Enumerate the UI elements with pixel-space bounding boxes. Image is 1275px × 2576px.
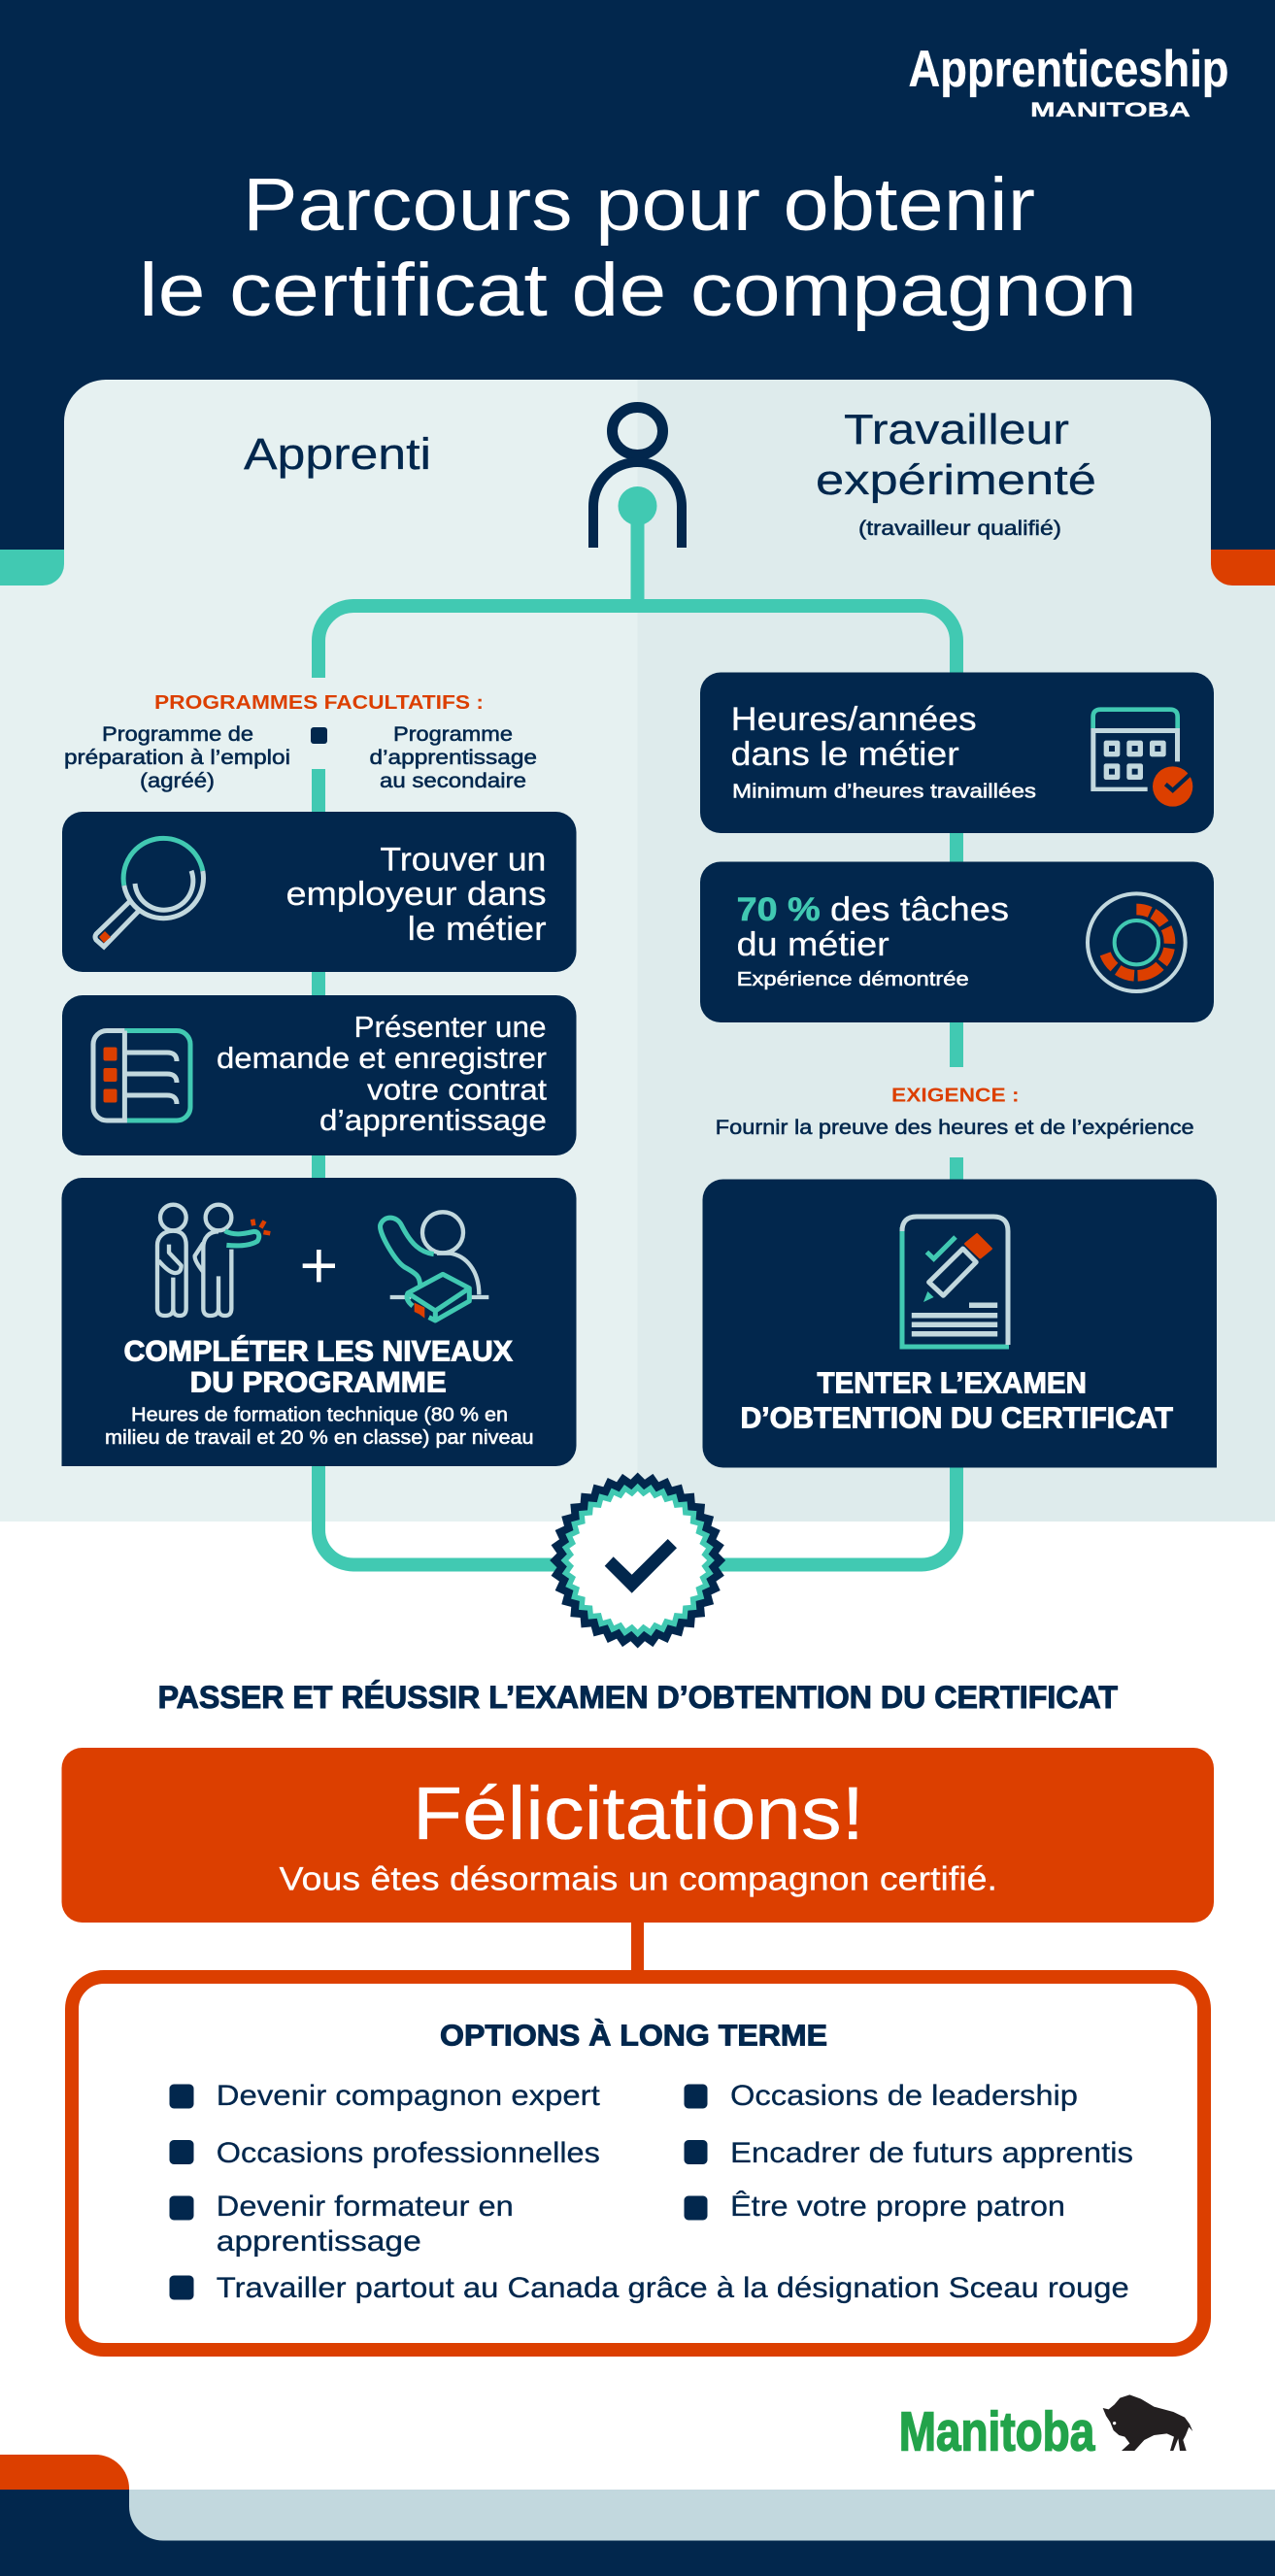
card: find an employer: Trouver un [380,841,546,878]
list: options: apprentissage [217,2225,421,2258]
logo: Apprenticeship Manitoba: Apprenticeship [909,41,1229,98]
text: requirement: Fournir la preuve des heures et de l’expérience [716,1116,1194,1139]
card: complete program levels: DU PROGRAMME [190,1367,447,1398]
heading: Travailleur expérimenté: (travailleur qualifié) [858,518,1061,540]
heading: long-term options: OPTIONS À LONG TERME [440,2019,827,2053]
card: 70% of trade tasks: Expérience démontrée [737,968,969,990]
connector lines: teal pathway [319,506,956,1565]
icon: person [593,408,682,548]
card: complete program levels: Heures de formation technique (80 % en [131,1404,508,1425]
card: hours and years in the trade: Heures/années [731,701,977,738]
text: optional programmes: Programme [393,722,513,746]
panel: pathway background [0,380,1275,1522]
list: options [170,2080,1133,2304]
list: options: Devenir formateur en [217,2191,514,2223]
card: find an employer [62,812,577,972]
card: 70% of trade tasks: 70 % [737,891,821,928]
text: optional programmes: préparation à l’emploi [64,746,290,769]
text: optional programmes: PROGRAMMES FACULTATIFS : [154,691,484,714]
teal corner tab [0,550,64,585]
list: options: Encadrer de futurs apprentis [730,2137,1133,2169]
text: requirement [716,1085,1194,1139]
list: options: Devenir compagnon expert [217,2080,601,2112]
card: find an employer: le métier [408,911,547,948]
logo: Manitoba wordmark and bison: Manitoba [899,2400,1095,2462]
text: optional programmes: Programme de [102,722,253,746]
card: complete program levels: milieu de travail et 20 % en classe) par niveau [105,1427,534,1449]
heading: Travailleur expérimenté [816,406,1096,540]
card: attempt certification exam [703,1179,1217,1468]
logo: Apprenticeship Manitoba: MANITOBA [1030,99,1191,121]
card: hours and years in the trade: dans le métier [731,736,959,773]
card: submit application: demande et enregistrer [217,1041,547,1075]
title: le certificat de compagnon [139,249,1137,332]
card: complete program levels [62,1178,577,1466]
card: complete program levels: COMPLÉTER LES NIVEAUX [124,1334,513,1367]
text: optional programmes: d’apprentissage [369,746,537,769]
list: options: Travailler partout au Canada grâce à la désignation Sceau rouge [217,2272,1129,2304]
card: hours and years in the trade [700,672,1214,833]
heading: Travailleur expérimenté: expérimenté [816,456,1096,504]
icon: calendar with check [1090,710,1192,807]
panel: congratulations [62,1748,1214,1923]
card: attempt certification exam: D’OBTENTION DU CERTIFICAT [740,1401,1173,1435]
orange corner tab [1211,550,1275,585]
footer band [0,2455,1275,2576]
text: optional programmes: au secondaire [380,769,526,792]
card: find an employer: employeur dans [286,876,547,913]
connector: orange [631,1918,644,1976]
card: submit application: votre contrat [367,1072,547,1107]
card: submit application [62,995,577,1155]
card: 70% of trade tasks [700,862,1214,1022]
title: Parcours pour obtenir [243,163,1035,247]
icon: exam document and pencil [902,1217,1009,1347]
list: options: Occasions professionnelles [217,2137,600,2169]
heading: Travailleur expérimenté: Travailleur [844,406,1069,453]
card: 70% of trade tasks: des tâches [830,891,1009,928]
text: optional programmes [64,691,537,792]
card: attempt certification exam: TENTER L’EXAMEN [818,1365,1087,1400]
panel: congratulations: Félicitations! [413,1772,864,1856]
card: hours and years in the trade: Minimum d’heures travaillées [732,780,1036,802]
text: requirement: EXIGENCE : [891,1085,1020,1107]
icon: magnifying glass [95,838,203,947]
heading: pass the exam: PASSER ET RÉUSSIR L’EXAMEN D’OBTENTION DU CERTIFICAT [158,1680,1118,1715]
title [139,163,1137,332]
card: 70% of trade tasks: du métier [737,926,889,963]
header background [0,0,1275,587]
logo: Apprenticeship Manitoba [909,41,1229,121]
icon: two people and student with book [157,1205,488,1321]
icon: progress dial [1088,893,1186,991]
icon: checklist [93,1031,190,1121]
card: submit application: Présenter une [353,1010,546,1044]
card: submit application: d’apprentissage [319,1103,547,1137]
list: options: Occasions de leadership [730,2080,1078,2112]
text: optional programmes: (agréé) [140,769,215,792]
panel: long-term options [72,1977,1204,2350]
list: options: Être votre propre patron [730,2191,1065,2223]
panel: congratulations: Vous êtes désormais un compagnon certifié. [280,1861,997,1898]
heading: Apprenti: Apprenti [244,429,431,479]
icon: check badge [550,1472,725,1649]
